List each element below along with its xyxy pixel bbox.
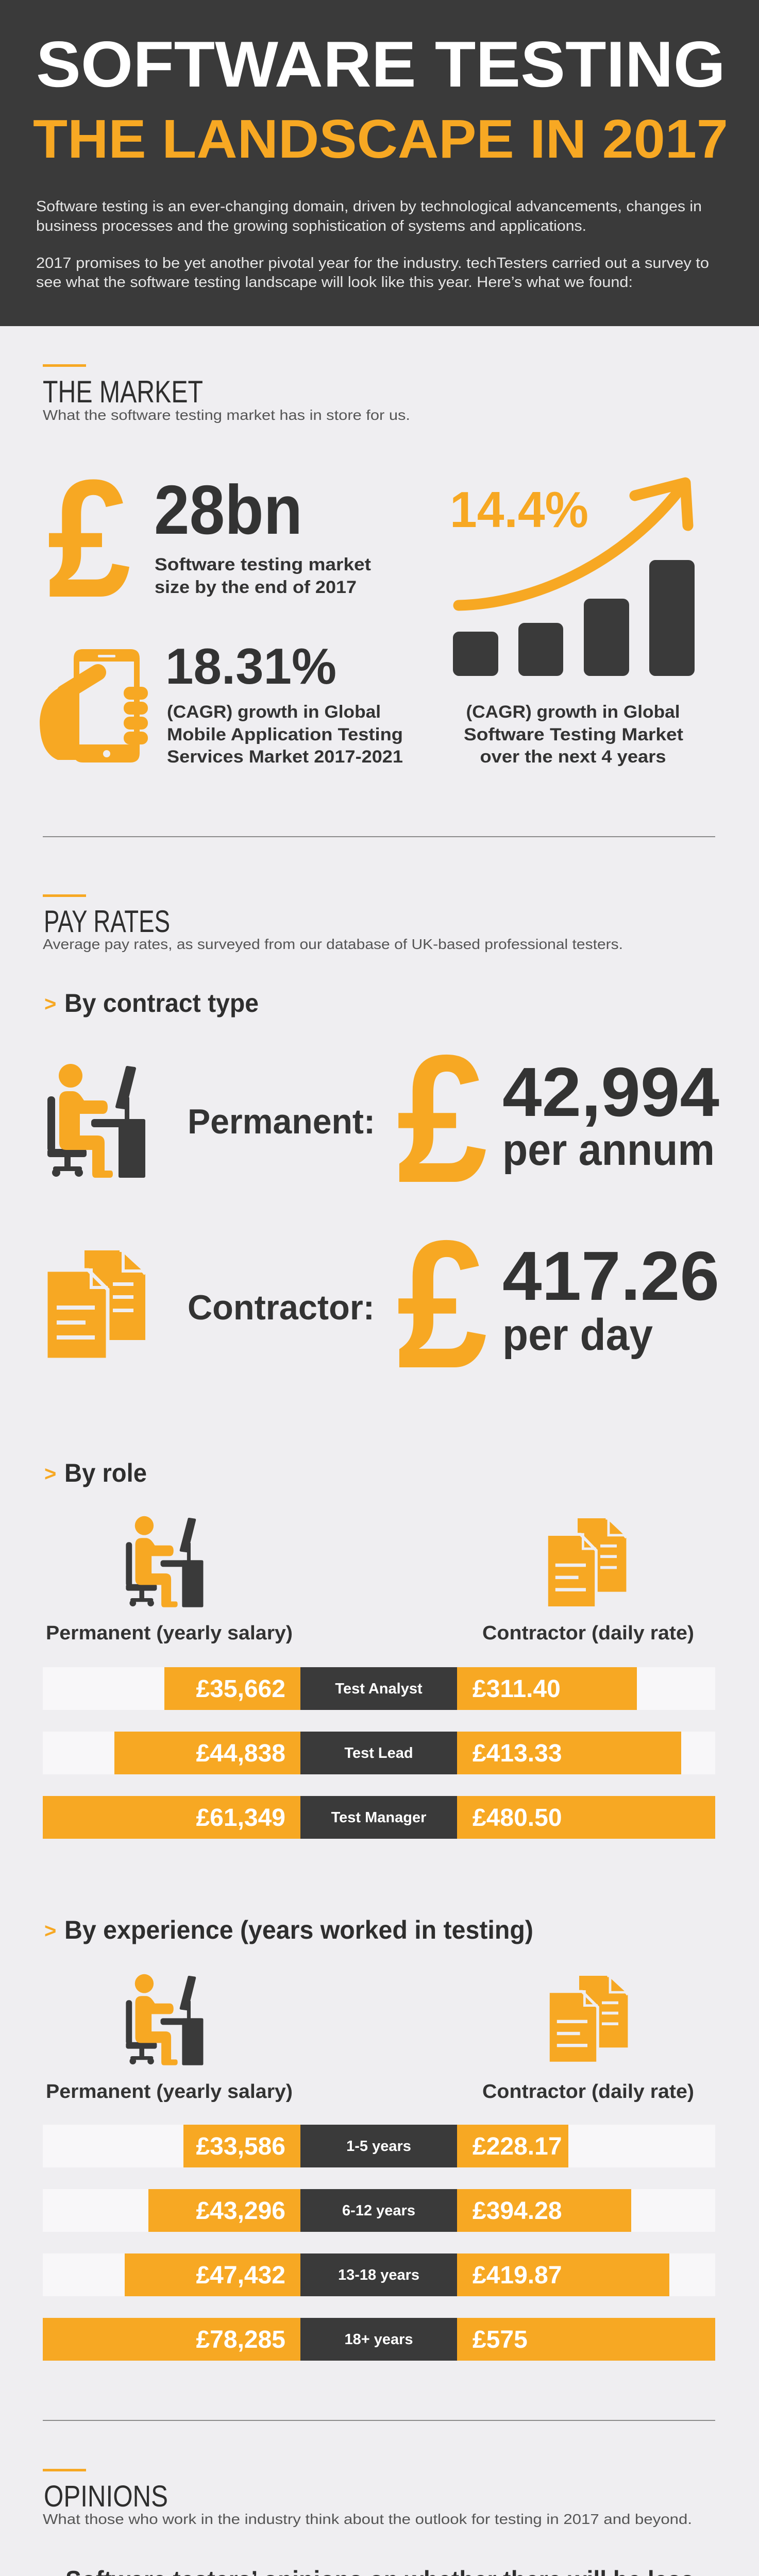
permanent average: £ <box>397 1018 487 1221</box>
chart: pay by experience: £47,432 <box>196 2262 285 2289</box>
stat: 18.31% mobile <box>40 638 403 767</box>
stat: 28bn <box>47 445 371 633</box>
permanent average: Permanent: <box>188 1102 375 1141</box>
intro text: business processes and the growing sophistication of systems and applications. <box>36 218 586 234</box>
subheading: by experience: By experience (years worked in testing) <box>64 1916 533 1944</box>
icon: desk worker <box>47 1064 145 1178</box>
stat: 18.31% mobile: 18.31% <box>165 638 336 694</box>
chart: pay by role <box>43 1667 715 1839</box>
contractor average: Contractor: <box>188 1288 375 1327</box>
contractor average: £ <box>397 1203 487 1406</box>
contractor average: 417.26 <box>502 1237 719 1315</box>
icon: documents <box>46 1250 145 1360</box>
contractor average <box>46 1203 719 1406</box>
chart: pay by role: Test Lead <box>344 1745 413 1761</box>
stat: 14.4% growth chart: over the next 4 years <box>480 747 666 767</box>
chart: pay by role: Test Analyst <box>335 1681 423 1697</box>
stat: 18.31% mobile: Services Market 2017-2021 <box>167 747 403 767</box>
stat: 14.4% growth chart: Software Testing Market <box>464 725 683 744</box>
icon: pound: £ <box>47 445 131 633</box>
permanent average: per annum <box>502 1125 715 1175</box>
icon: phone in hand <box>40 649 148 762</box>
section heading: the market <box>43 364 410 423</box>
subheading: by role: By role <box>64 1459 147 1487</box>
chart: pay by experience: £419.87 <box>473 2262 562 2289</box>
stat: 14.4% growth chart <box>450 481 695 767</box>
chart: pay by experience: 18+ years <box>344 2331 413 2348</box>
section heading: pay rates: Average pay rates, as surveyed from our database of UK-based professional testers. <box>43 936 623 952</box>
section heading: the market: THE MARKET <box>43 375 203 409</box>
subheading: by contract type: > <box>44 993 56 1015</box>
subheading: by experience: > <box>44 1920 56 1942</box>
subheading: by role: > <box>44 1463 56 1485</box>
bar chart <box>453 560 695 676</box>
stat: 28bn: size by the end of 2017 <box>155 578 357 597</box>
stat: 14.4% growth chart: 14.4% <box>450 481 588 538</box>
section heading: the market: What the software testing market has in store for us. <box>43 407 410 423</box>
chart: pay by experience: 6-12 years <box>342 2202 415 2219</box>
chart: pay by experience: 13-18 years <box>338 2267 419 2283</box>
role column headers: Contractor (daily rate) <box>482 1622 694 1644</box>
section heading: opinions: OPINIONS <box>44 2480 168 2513</box>
chart: pay by role: £35,662 <box>196 1675 285 1703</box>
chart: pay by experience: £228.17 <box>473 2133 562 2160</box>
subtitle: THE LANDSCAPE IN 2017 <box>33 109 728 170</box>
chart: pay by role: £413.33 <box>473 1740 562 1767</box>
chart: pay by role: £44,838 <box>196 1740 285 1767</box>
permanent average: 42,994 <box>502 1053 719 1131</box>
arrow <box>459 483 688 605</box>
chart: pay by experience: £78,285 <box>196 2326 285 2353</box>
chart: pay by role: £61,349 <box>196 1804 285 1832</box>
experience column headers: Contractor (daily rate) <box>482 2081 694 2103</box>
chart: pay by experience: £33,586 <box>196 2133 285 2160</box>
chart: pay by role: £480.50 <box>473 1804 562 1832</box>
experience column headers: Permanent (yearly salary) <box>46 2081 293 2103</box>
chart: pay by experience: 1-5 years <box>346 2138 411 2155</box>
chart: pay by experience <box>43 2125 715 2361</box>
section heading: opinions <box>43 2469 692 2527</box>
section heading: pay rates: PAY RATES <box>44 904 170 939</box>
stat: 18.31% mobile: (CAGR) growth in Global <box>167 702 381 722</box>
intro text: 2017 promises to be yet another pivotal year for the industry. techTesters carried out a survey to <box>36 255 709 272</box>
experience column headers <box>46 1974 694 2103</box>
stat: 14.4% growth chart: (CAGR) growth in Global <box>466 702 680 722</box>
role column headers <box>46 1516 694 1644</box>
stat: 28bn: 28bn <box>154 471 302 549</box>
chart: pay by role: £311.40 <box>473 1675 561 1703</box>
contractor average: per day <box>502 1310 653 1360</box>
permanent average <box>47 1018 719 1221</box>
intro text: Software testing is an ever-changing domain, driven by technological advancements, changes in <box>36 198 702 215</box>
title: SOFTWARE TESTING <box>36 28 726 100</box>
header panel <box>0 0 759 326</box>
stat: 18.31% mobile: Mobile Application Testing <box>167 725 403 744</box>
chart: pay by experience: £43,296 <box>196 2197 285 2225</box>
section heading: pay rates <box>43 894 623 952</box>
section heading: opinions: What those who work in the industry think about the outlook for testing in 2017 and beyond. <box>43 2511 692 2527</box>
stat: 28bn: Software testing market <box>155 555 371 574</box>
intro text: see what the software testing landscape will look like this year. Here’s what we found: <box>36 274 633 291</box>
role column headers: Permanent (yearly salary) <box>46 1622 293 1644</box>
intro text <box>36 198 709 291</box>
chart: pay by role: Test Manager <box>331 1809 426 1826</box>
chart: pay by experience: £575 <box>473 2326 528 2353</box>
subheading: by contract type: By contract type <box>64 989 259 1018</box>
chart: pay by experience: £394.28 <box>473 2197 562 2225</box>
